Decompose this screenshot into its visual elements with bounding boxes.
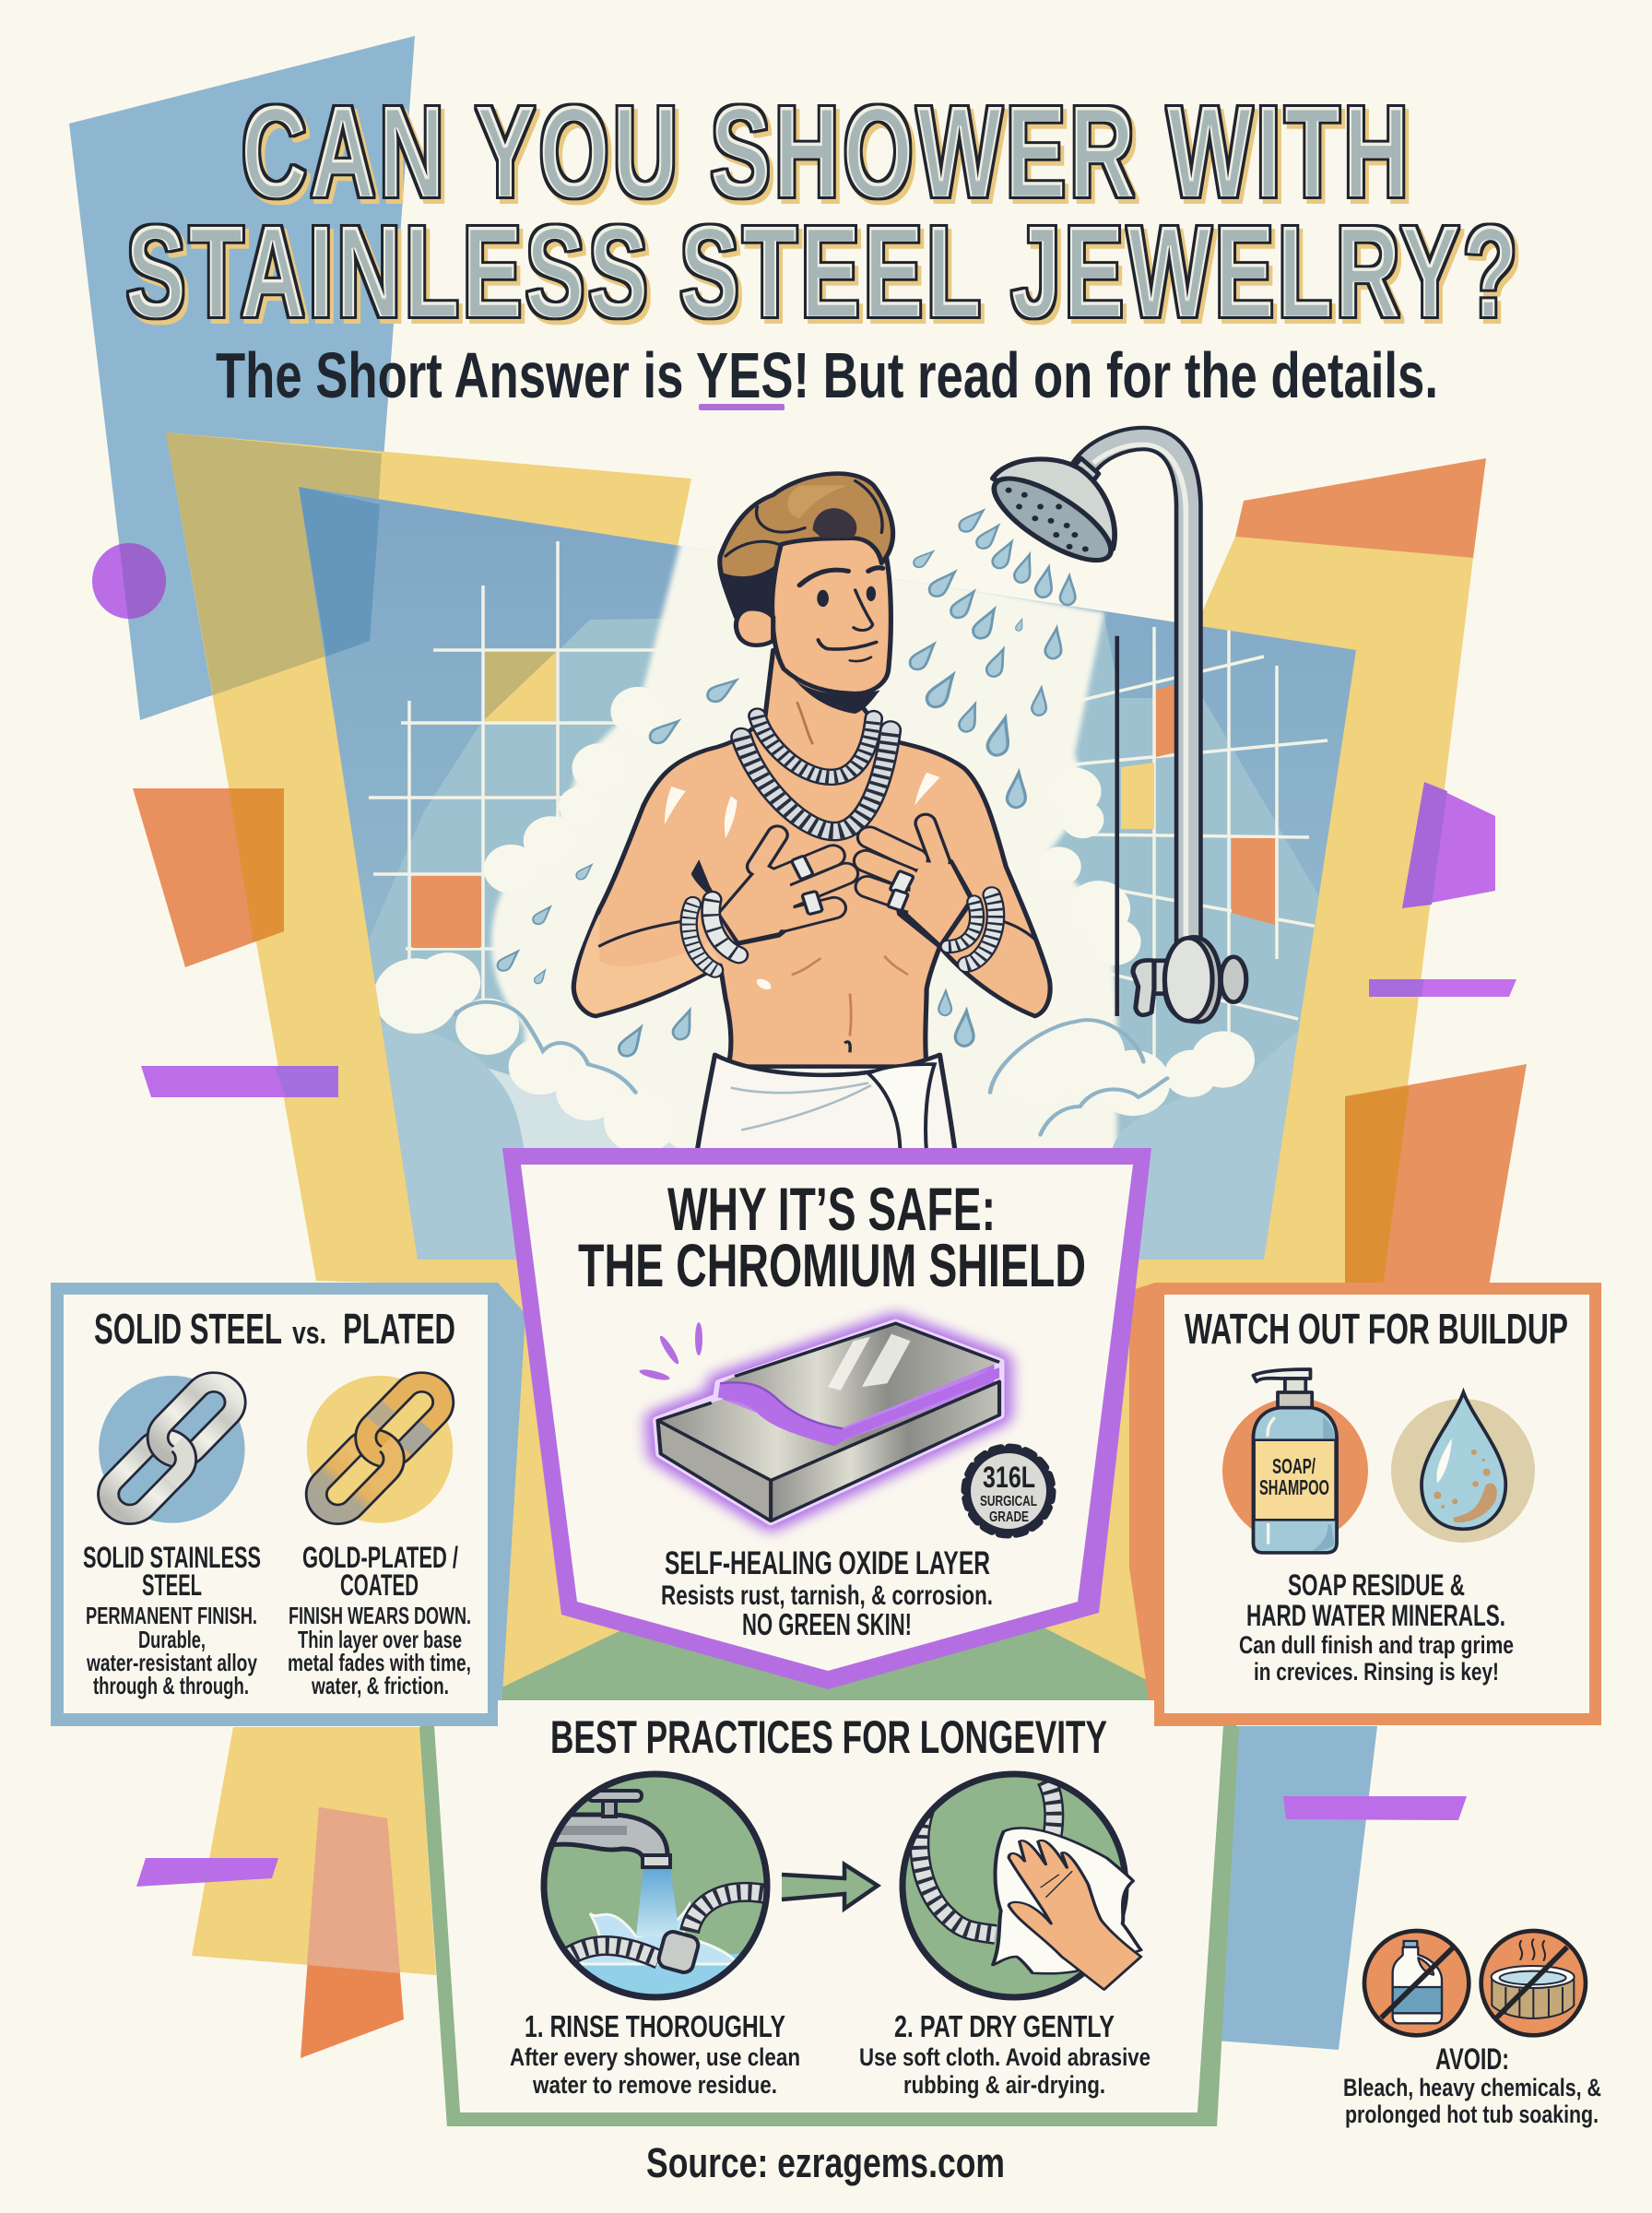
text: step 2 pat dry: [859, 2009, 1150, 2099]
heading: solid steel vs plated: SOLID STEEL: [94, 1305, 282, 1353]
icon: gold plated chain link: [307, 1374, 453, 1523]
text: step 2 pat dry: rubbing & air-drying.: [903, 2071, 1105, 2099]
badge: 316L surgical grade: [965, 1448, 1052, 1534]
text: gold-plated / coated: water, & friction.: [311, 1672, 449, 1699]
icon: water droplets: [495, 506, 1077, 1059]
badge: 316L surgical grade: SURGICAL: [980, 1494, 1037, 1509]
heading: solid steel vs plated: vs.: [292, 1316, 326, 1351]
text: solid stainless steel: Durable,: [138, 1626, 206, 1653]
icon: no bleach: [1364, 1931, 1469, 2035]
text: gold-plated / coated: FINISH WEARS DOWN.: [289, 1602, 471, 1629]
text: soap residue and hard water minerals: [1239, 1568, 1514, 1686]
text: self-healing oxide layer: [661, 1545, 993, 1641]
text: solid stainless steel: SOLID STAINLESS: [83, 1541, 261, 1574]
text: gold-plated / coated: Thin layer over base: [298, 1626, 462, 1653]
body shading and wet highlights: [576, 702, 1039, 1052]
badge: 316L surgical grade: 316L: [983, 1461, 1035, 1494]
heading: best practices for longevity: BEST PRACTICES FOR LONGEVITY: [550, 1711, 1107, 1763]
icon: soap bottle: SOAP/: [1272, 1454, 1316, 1478]
shower arm: [1082, 439, 1188, 944]
text: avoid: [1343, 2042, 1601, 2128]
text: solid stainless steel: [83, 1541, 261, 1699]
heading: why it's safe: THE CHROMIUM SHIELD: [578, 1231, 1086, 1299]
icon: rinse under faucet: [544, 1774, 774, 2001]
hero scene background: tiled shower wall: [299, 487, 1356, 1260]
arrow between steps: [782, 1864, 878, 1909]
panel: why it's safe chromium shield: [502, 1148, 1151, 1689]
text: soap residue and hard water minerals: HARD WATER MINERALS.: [1246, 1599, 1505, 1632]
text: self-healing oxide layer: NO GREEN SKIN!: [742, 1607, 912, 1641]
text: gold-plated / coated: [288, 1541, 471, 1699]
hands with rings: [720, 823, 972, 946]
text: soap residue and hard water minerals: SOAP RESIDUE &: [1288, 1568, 1465, 1602]
necklaces: [741, 716, 891, 832]
text: avoid: AVOID:: [1435, 2042, 1509, 2076]
title: [126, 78, 1521, 344]
text: step 1 rinse: water to remove residue.: [532, 2071, 777, 2099]
text: gold-plated / coated: GOLD-PLATED /: [302, 1541, 458, 1574]
text: solid stainless steel: through & through.: [93, 1672, 249, 1699]
bracelets: [689, 894, 996, 970]
text: step 2 pat dry: 2. PAT DRY GENTLY: [894, 2009, 1115, 2043]
icon: soap bottle: [1222, 1369, 1368, 1553]
icon: soap bottle: SHAMPOO: [1259, 1475, 1329, 1499]
text: self-healing oxide layer: SELF-HEALING OXIDE LAYER: [665, 1545, 990, 1581]
panel: watch out for buildup: [1129, 1283, 1601, 1725]
panel: solid steel vs plated: [51, 1283, 525, 1726]
panel: best practices for longevity: [419, 1700, 1239, 2126]
text: step 1 rinse: After every shower, use clean: [510, 2043, 800, 2071]
head and face: [720, 474, 893, 714]
heading: why it's safe: WHY IT’S SAFE:: [667, 1175, 996, 1243]
text: solid stainless steel: STEEL: [142, 1568, 202, 1602]
underline: YES: [699, 404, 785, 410]
towel: [696, 1055, 956, 1156]
icon: sparkle marks: [639, 1322, 702, 1382]
text: soap residue and hard water minerals: in crevices. Rinsing is key!: [1254, 1658, 1499, 1686]
icon: shower valve: [1133, 937, 1246, 1022]
icon: pat dry with cloth: [903, 1774, 1141, 1997]
source line: Source: ezragems.com: [646, 2139, 1005, 2186]
illustration: man in shower wearing steel jewelry: [495, 439, 1246, 1156]
text: gold-plated / coated: metal fades with time,: [288, 1649, 471, 1676]
heading: solid steel vs plated: PLATED: [343, 1305, 455, 1353]
text: step 1 rinse: 1. RINSE THOROUGHLY: [525, 2009, 785, 2043]
torso and arms: [573, 650, 1050, 1067]
text: solid stainless steel: PERMANENT FINISH.: [86, 1602, 257, 1629]
heading: why it's safe: [578, 1175, 1086, 1299]
icon: steel slab with oxide layer: [658, 1323, 999, 1521]
badge: 316L surgical grade: GRADE: [989, 1509, 1029, 1525]
icon: hard water drop: [1391, 1392, 1535, 1543]
text: self-healing oxide layer: Resists rust, tarnish, & corrosion.: [661, 1580, 993, 1611]
icon: no hot tub: [1481, 1931, 1586, 2035]
text: soap residue and hard water minerals: Can dull finish and trap grime: [1239, 1631, 1514, 1659]
text: step 1 rinse: [510, 2009, 800, 2099]
thin vertical wall pipe: [1114, 636, 1121, 1016]
text: solid stainless steel: water-resistant alloy: [86, 1649, 257, 1676]
text: step 2 pat dry: Use soft cloth. Avoid abrasive: [859, 2043, 1150, 2071]
icon: steel chain link: [99, 1374, 245, 1523]
icon: shower head: [981, 458, 1124, 574]
text: gold-plated / coated: COATED: [340, 1568, 419, 1602]
